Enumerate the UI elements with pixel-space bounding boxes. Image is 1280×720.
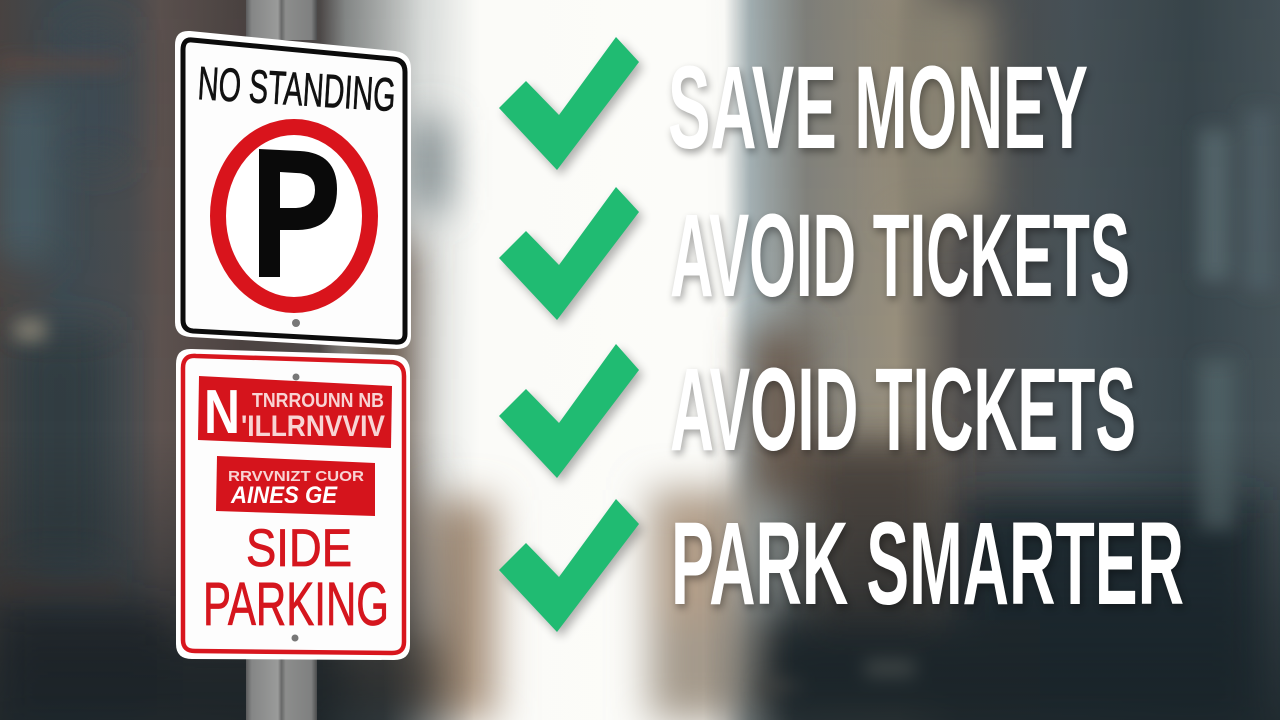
sign: side parking bbox=[176, 349, 410, 660]
checkmark 3 bbox=[499, 344, 643, 483]
sign heading: NO STANDING bbox=[196, 56, 397, 121]
red panel: lower notice: RRVVNIZT CUOR bbox=[228, 468, 364, 485]
red panel: lower notice bbox=[216, 456, 375, 516]
no parking symbol bbox=[218, 127, 370, 305]
sign: no standing bbox=[175, 31, 411, 349]
sign text: side: SIDE bbox=[246, 519, 352, 578]
sign text: parking: PARKING bbox=[203, 570, 389, 638]
red panel: upper notice: N bbox=[204, 378, 240, 447]
label: save money bbox=[668, 42, 1090, 178]
checkmark 2 bbox=[499, 187, 643, 325]
sign pole bbox=[246, 0, 317, 720]
checkmark 4 bbox=[499, 499, 643, 637]
red panel: upper notice: 'ILLRNVVIV bbox=[241, 410, 385, 443]
red panel: lower notice: AINES GE bbox=[230, 482, 338, 509]
red panel: upper notice bbox=[198, 376, 392, 448]
red panel: upper notice: TNRROUNN NB bbox=[252, 390, 384, 412]
checkmark 1 bbox=[499, 37, 643, 175]
